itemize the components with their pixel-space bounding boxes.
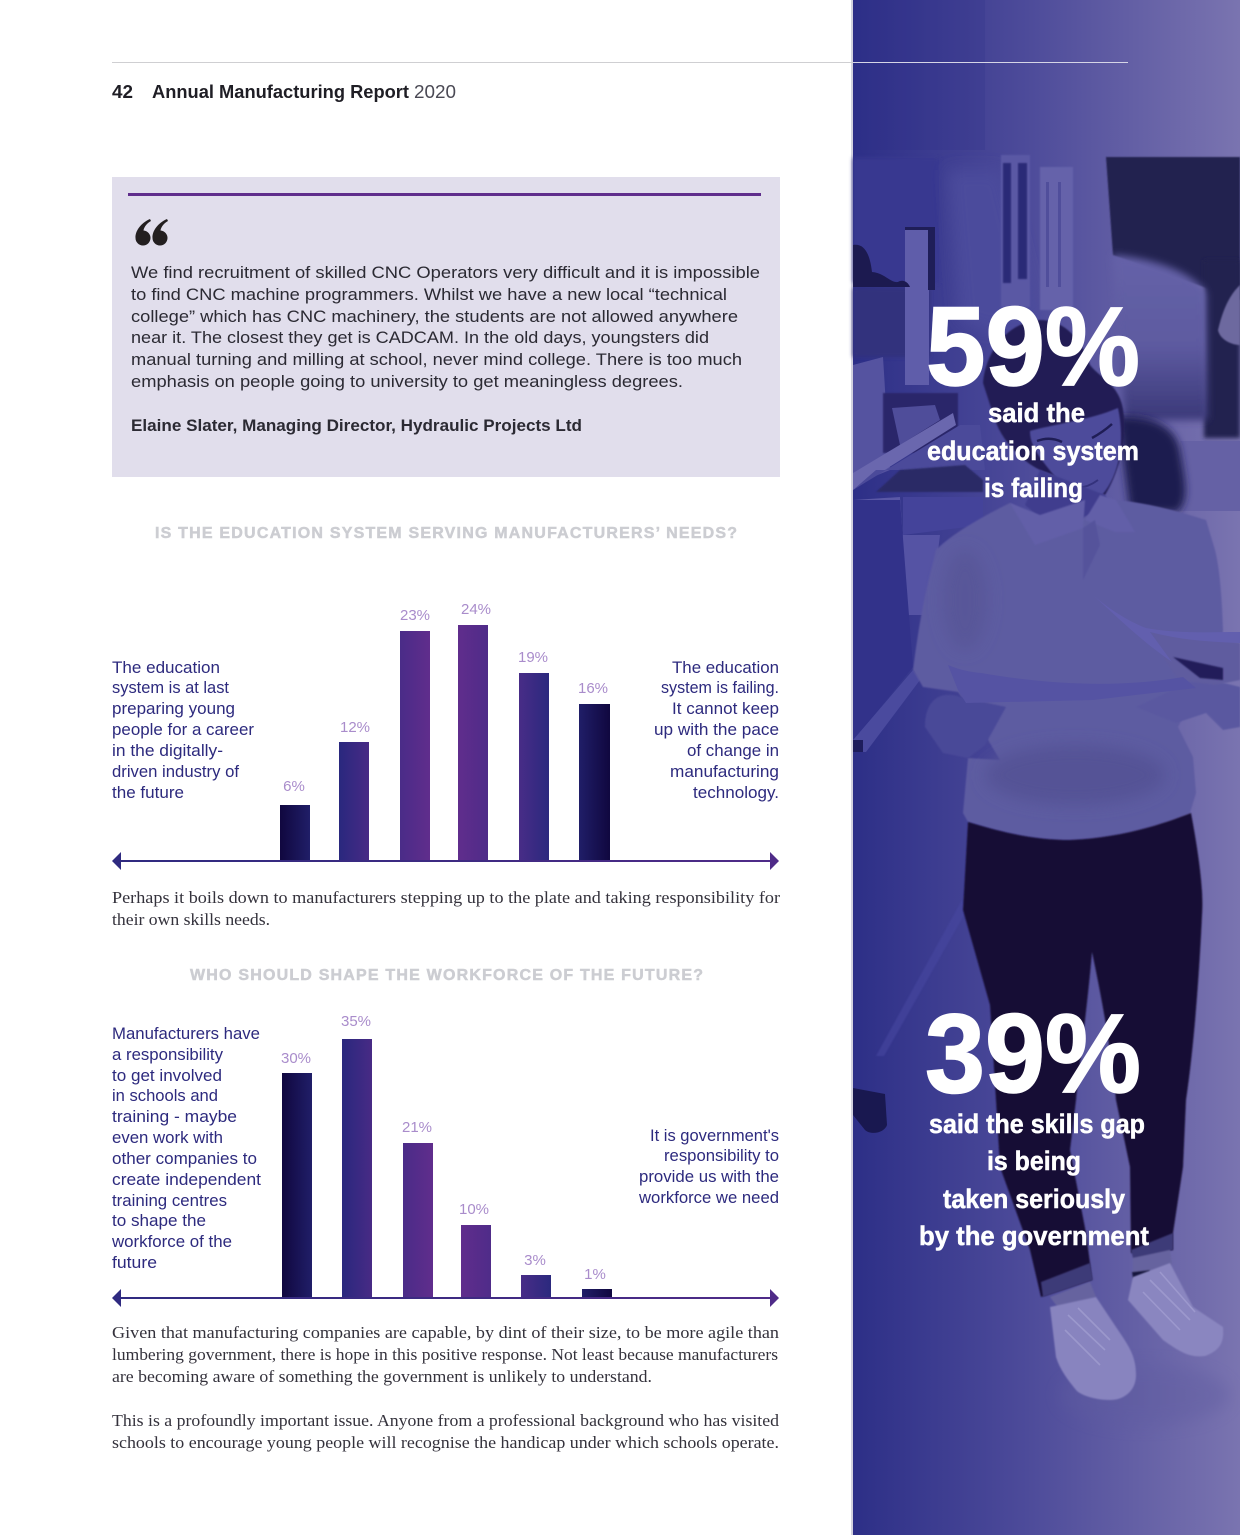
body text 3: This is a profoundly important issue. Anyone from a professional background who has visited [112,1411,780,1430]
body text 3: schools to encourage young people will recognise the handicap under which schools operate. [112,1433,779,1452]
chart 1 left label [112,658,254,802]
quote text [131,263,760,391]
page header: 2020 [414,81,456,102]
chart 1 right label: up with the pace [654,720,779,739]
photo: white trainers [1050,1263,1223,1400]
chart 2 left label: Manufacturers have [112,1024,260,1043]
quote text: near it. The closest they get is CADCAM. In the old days, youngsters did [131,328,709,347]
stat: 39%: taken seriously [943,1184,1125,1214]
stat: 59%: is failing [984,473,1083,503]
body text 1 [112,888,780,929]
body text 2: Given that manufacturing companies are capable, by dint of their size, to be more agile than [112,1323,780,1342]
stat: 59%: 59% [926,284,1140,409]
icon: quotation mark [135,219,168,245]
body text 1: Perhaps it boils down to manufacturers stepping up to the plate and taking responsibility for [112,888,780,907]
chart 1 left label: the future [112,783,184,802]
photo: dark board behind the figure [1106,157,1240,300]
bar chart: workforce: 10% [459,1201,489,1218]
body text 2: are becoming aware of something the government is unlikely to understand. [112,1367,652,1386]
stat: 39%: by the government [919,1221,1149,1251]
chart 2 left label: even work with [112,1128,223,1147]
stat: 39%: is being [987,1146,1081,1176]
photo: machinery at left [853,227,985,752]
quote text: college” which has CNC machinery, the students are not allowed anywhere [131,307,738,326]
bar chart: workforce [112,1013,779,1307]
chart 2 left label [111,1024,261,1272]
quote text: emphasis on people going to university to get meaningless degrees. [131,372,683,391]
body text 2 [112,1323,780,1386]
bar chart: education system: 6% [283,778,305,795]
chart 2 right label: It is government's [650,1126,779,1145]
chart 2 left label: a responsibility [112,1045,223,1064]
chart 1 left label: people for a career [112,720,254,739]
bar chart: education system: 12% [340,719,370,736]
chart 1 left label: driven industry of [112,762,239,781]
photo: polo shirt [913,500,1223,840]
bar chart: workforce: 30% [281,1050,311,1067]
quote attribution: Elaine Slater, Managing Director, Hydraulic Projects Ltd [131,416,582,435]
bar chart: workforce: 21% [402,1119,432,1136]
bar chart: education system: 19% [518,649,548,666]
chart 2 left label: to shape the [112,1211,206,1230]
chart 1 right label: manufacturing [670,762,779,781]
chart 2 left label: other companies to [112,1149,257,1168]
stat: 39%: 39% [925,991,1141,1116]
bar chart: education system [112,601,779,870]
bar chart: education system: 16% [578,680,608,697]
stat: 59%: said the [988,398,1085,428]
chart 1 right label: technology. [693,783,779,802]
chart 1 right label: of change in [687,741,779,760]
page header: Annual Manufacturing Report [152,81,409,102]
chart 2 left label: training - maybe [112,1107,237,1126]
body text 2: lumbering government, there is hope in this positive response. Not least because manufacturers [112,1345,778,1364]
photo: woman's hair, face and neck [983,320,1124,535]
photo: shoe shadow [1060,1365,1230,1425]
stat: 39%: said the skills gap [929,1109,1145,1139]
body text 1: their own skills needs. [112,910,270,929]
heading: chart 1: IS THE EDUCATION SYSTEM SERVING MANUFACTURERS’ NEEDS? [155,525,737,542]
photo: blurred passer-by [1113,255,1240,512]
photo: back wall and doors [853,0,1073,330]
stat: 59%: education system [927,436,1139,466]
quote text: manual turning and milling at school, never mind college. There is too much [131,350,742,369]
chart 1 right label: The education [672,658,779,677]
chart 2 right label: responsibility to [664,1146,779,1165]
stat: 59% [926,284,1140,503]
chart 1 right label [654,658,779,802]
quote text: to find CNC machine programmers. Whilst we have a new local “technical [131,285,727,304]
panel: quote [112,177,780,477]
photo: shirt folds [943,550,1165,805]
photo: turned-up cuffs and ankles [1041,1233,1173,1310]
page header: 42 [112,81,133,102]
chart 2 left label: create independent [112,1170,261,1189]
chart 1 right label: It cannot keep [672,699,779,718]
bar chart: workforce: 3% [524,1252,546,1269]
chart 2 left label: future [112,1253,157,1272]
photo: floor edge and caster [853,900,968,1133]
chart 2 left label: workforce of the [111,1232,232,1251]
bar chart: workforce: 35% [341,1013,371,1030]
bar chart: education system: 23% [400,607,430,624]
heading: chart 2: WHO SHOULD SHAPE THE WORKFORCE OF THE FUTURE? [190,967,703,984]
chart 1 left label: preparing young [112,699,235,718]
chart 2 left label: in schools and [112,1086,218,1105]
chart 2 left label: to get involved [112,1066,222,1085]
chart 2 left label: training centres [112,1191,227,1210]
chart 1 left label: in the digitally- [112,741,223,760]
photo: dark jeans [963,813,1202,1297]
header rule [112,62,853,63]
chart 2 right label: provide us with the [639,1167,779,1186]
photo: collar [1010,495,1135,580]
quote text: We find recruitment of skilled CNC Operators very difficult and it is impossible [131,263,760,282]
chart 1 right label: system is failing. [661,678,779,697]
panel: duotone photo column [851,0,1240,1535]
body text 3 [112,1411,780,1452]
bar chart: education system: 24% [461,601,491,618]
chart 2 right label: workforce we need [638,1188,779,1207]
divider rule over panel [853,62,1128,63]
stat: 39% [919,991,1149,1251]
chart 2 right label [638,1126,779,1207]
chart 1 left label: system is at last [112,678,229,697]
photo: hands and sheets of paper [925,595,1240,758]
chart 1 left label: The education [112,658,220,677]
bar chart: workforce: 1% [584,1266,606,1283]
